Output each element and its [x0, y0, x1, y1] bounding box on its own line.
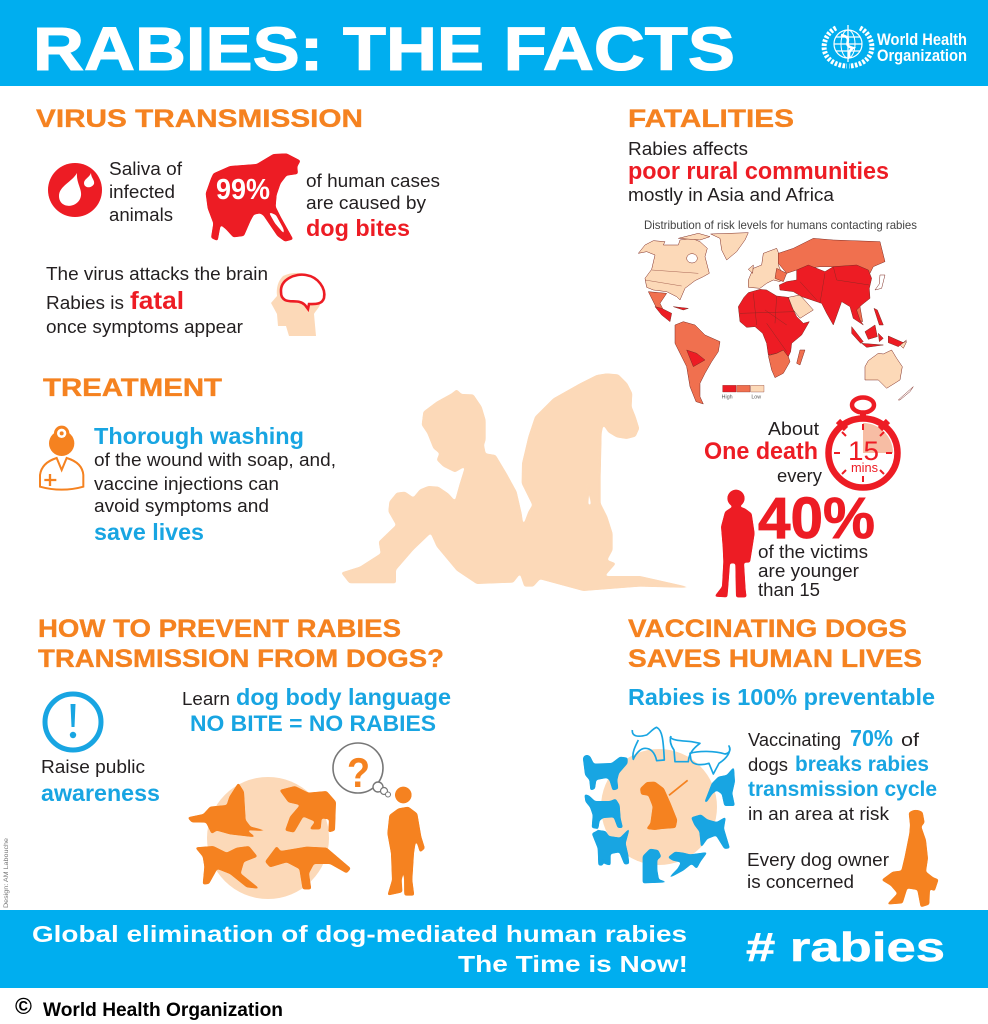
heading: vaccinating dogs — [628, 615, 922, 673]
one death text — [704, 419, 822, 486]
40 percent stat: of the victims — [758, 542, 868, 562]
icon: doctor — [40, 426, 83, 490]
treatment text: of the wound with soap, and, — [94, 450, 336, 470]
icon: WHO emblem — [824, 25, 872, 66]
vaccination text: Vaccinating — [748, 730, 841, 750]
icon: exclamation mark — [45, 694, 101, 750]
icon: head with brain — [271, 273, 324, 336]
footer banner — [0, 910, 988, 988]
icon: dog owner and dog — [881, 810, 939, 907]
design credit: Design: AM Labouche — [3, 838, 10, 908]
saliva text: Saliva of — [109, 159, 183, 179]
icon: child silhouette — [387, 787, 425, 896]
heading: vaccinating dogs: VACCINATING DOGS — [628, 615, 907, 643]
awareness text: awareness — [41, 780, 160, 806]
heading: how to prevent: HOW TO PREVENT RABIES — [38, 615, 401, 643]
vaccination text: in an area at risk — [748, 804, 890, 824]
brain text: Rabies is — [46, 293, 124, 313]
dog owner text — [747, 850, 889, 892]
icon: child silhouette — [714, 490, 755, 597]
dog bites text: of human cases — [306, 171, 440, 191]
one death text: About — [768, 419, 819, 439]
chart: world risk map — [638, 233, 913, 404]
treatment text — [94, 423, 336, 545]
vaccination text: of — [901, 730, 920, 750]
panel: vaccinating dogs — [583, 615, 939, 907]
body language text — [182, 684, 451, 736]
one death text: One death — [704, 438, 818, 465]
40 percent stat: are younger — [758, 561, 859, 581]
dog bites text: are caused by — [306, 193, 426, 213]
body language text: Learn — [182, 689, 230, 709]
illustration: child and dog silhouette — [341, 373, 693, 591]
brain text: once symptoms appear — [46, 317, 243, 337]
copyright: World Health Organization — [43, 1000, 283, 1021]
icon: thought bubble: ? — [347, 749, 370, 796]
vaccination text: breaks rabies — [795, 753, 929, 776]
treatment text: avoid symptoms and — [94, 496, 269, 516]
one death text: every — [777, 466, 822, 486]
vaccination text: dogs — [748, 755, 788, 775]
vaccination text: transmission cycle — [748, 778, 937, 801]
treatment text: Thorough washing — [94, 423, 304, 449]
awareness text — [41, 757, 160, 806]
icon: red dog with 99% — [206, 153, 301, 242]
treatment text: vaccine injections can — [94, 474, 279, 494]
panel: fatalities — [628, 105, 917, 600]
dog bites text — [306, 171, 440, 241]
fatalities text: poor rural communities — [628, 158, 889, 185]
fatalities text: mostly in Asia and Africa — [628, 185, 835, 205]
copyright — [15, 993, 283, 1021]
panel: treatment — [40, 374, 336, 545]
icon: stopwatch 15 mins: mins — [851, 461, 878, 475]
awareness text: Raise public — [41, 757, 145, 777]
call to action: The Time is Now! — [458, 951, 688, 977]
title: RABIES: THE FACTS — [33, 15, 735, 83]
icon: saliva drops — [48, 163, 102, 217]
icon: stopwatch 15 mins: 15 — [848, 436, 879, 466]
panel: virus transmission — [36, 105, 440, 337]
heading: how to prevent — [38, 615, 444, 673]
saliva text — [109, 159, 183, 225]
brain text: The virus attacks the brain — [46, 264, 268, 284]
heading: treatment: TREATMENT — [43, 374, 222, 402]
brain text — [46, 264, 268, 337]
40 percent stat: than 15 — [758, 580, 820, 600]
vaccination text: 70% — [850, 725, 893, 751]
vaccination text — [748, 725, 937, 824]
map legend — [722, 385, 764, 401]
40 percent stat — [758, 486, 875, 600]
illustration: vaccinated dog circle — [583, 727, 735, 883]
dog bites text: dog bites — [306, 215, 410, 241]
map title: Distribution of risk levels for humans contacting rabies — [644, 218, 917, 232]
organisation name: Organization — [877, 46, 967, 65]
map legend: High — [722, 395, 733, 401]
panel: how to prevent — [38, 615, 451, 899]
fatalities text: Rabies affects — [628, 139, 748, 159]
body language text: dog body language — [236, 684, 451, 710]
hashtag: # rabies — [746, 924, 945, 970]
organisation name — [877, 30, 967, 65]
brain text: fatal — [130, 287, 184, 315]
fatalities text — [628, 139, 889, 205]
icon: stopwatch 15 mins — [828, 398, 898, 488]
dog owner text: Every dog owner — [747, 850, 889, 870]
heading: how to prevent: TRANSMISSION FROM DOGS? — [38, 645, 444, 673]
dog owner text: is concerned — [747, 872, 854, 892]
icon: red dog with 99%: 99% — [216, 174, 270, 206]
call to action — [32, 921, 688, 977]
heading: virus transmission: VIRUS TRANSMISSION — [36, 105, 363, 133]
heading: fatalities: FATALITIES — [628, 105, 794, 133]
saliva text: infected — [109, 182, 175, 202]
body language text: NO BITE = NO RABIES — [190, 711, 436, 736]
illustration: dog body language — [187, 777, 351, 899]
header banner — [0, 0, 988, 86]
icon: thought bubble — [333, 743, 390, 797]
preventable text: Rabies is 100% preventable — [628, 684, 935, 710]
heading: vaccinating dogs: SAVES HUMAN LIVES — [628, 645, 922, 673]
saliva text: animals — [109, 205, 173, 225]
call to action: Global elimination of dog-mediated human rabies — [32, 921, 687, 947]
copyright: © — [15, 993, 32, 1019]
treatment text: save lives — [94, 519, 204, 545]
organisation name: World Health — [877, 30, 967, 49]
map legend: Low — [751, 395, 761, 401]
40 percent stat: 40% — [758, 486, 875, 551]
